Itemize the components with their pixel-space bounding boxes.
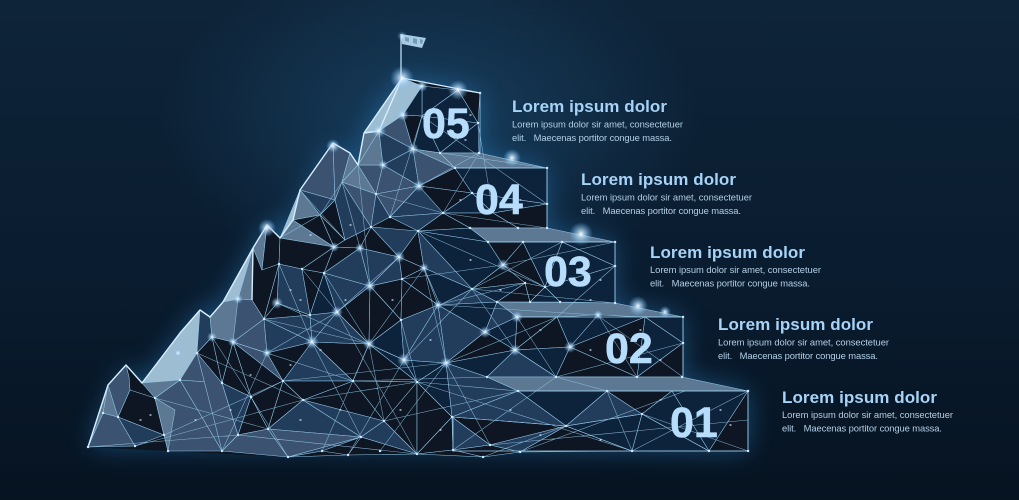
ridge highlights (88, 78, 480, 447)
step number 02: 02 (605, 325, 653, 373)
step 03 top surface (470, 228, 615, 242)
step 04 top surface (440, 153, 547, 168)
sparkle speckles (140, 115, 731, 440)
text block 03: Lorem ipsum dolor sir amet, consectetuer (650, 264, 821, 275)
step number 04: 04 (475, 176, 523, 224)
mountain base silhouette (88, 78, 748, 457)
text block 01 (782, 388, 953, 434)
step edge highlights (453, 93, 748, 451)
mesh nodes (88, 93, 748, 457)
text block 05: Lorem ipsum dolor (512, 97, 667, 116)
long crossing mesh lines (88, 116, 748, 457)
text block 02: elit. Maecenas portitor congue massa. (718, 350, 878, 361)
text block 04: elit. Maecenas portitor congue massa. (581, 205, 741, 216)
text block 03 (650, 243, 821, 288)
text block 05 (512, 97, 683, 143)
step 02 top surface (497, 302, 683, 317)
mountain glow (88, 78, 748, 451)
text block 01: Lorem ipsum dolor (782, 388, 937, 407)
text block 03: Lorem ipsum dolor (650, 243, 805, 262)
icon: flag on summit (397, 31, 426, 78)
text block 04: Lorem ipsum dolor sir amet, consectetuer (581, 192, 752, 202)
text block 05: elit. Maecenas portitor congue massa. (512, 132, 672, 143)
text block 02: Lorem ipsum dolor (718, 315, 873, 334)
polygon mesh facets (88, 78, 748, 457)
glowing nodes (174, 66, 671, 369)
step 01 top surface (487, 377, 748, 391)
mountain (88, 78, 748, 457)
step number 05: 05 (422, 100, 470, 148)
text block 01: Lorem ipsum dolor sir amet, consectetuer (782, 409, 953, 420)
step number 03: 03 (544, 248, 592, 296)
text block 02: Lorem ipsum dolor sir amet, consectetuer (718, 336, 889, 348)
text block 05: Lorem ipsum dolor sir amet, consectetuer (512, 118, 683, 130)
background halo (160, 0, 700, 290)
text block 02 (718, 315, 889, 361)
step number 01: 01 (670, 399, 718, 447)
text block 04: Lorem ipsum dolor (581, 170, 736, 189)
text block 04 (581, 170, 752, 216)
text block 03: elit. Maecenas portitor congue massa. (650, 278, 810, 288)
text block 01: elit. Maecenas portitor congue massa. (782, 422, 942, 434)
